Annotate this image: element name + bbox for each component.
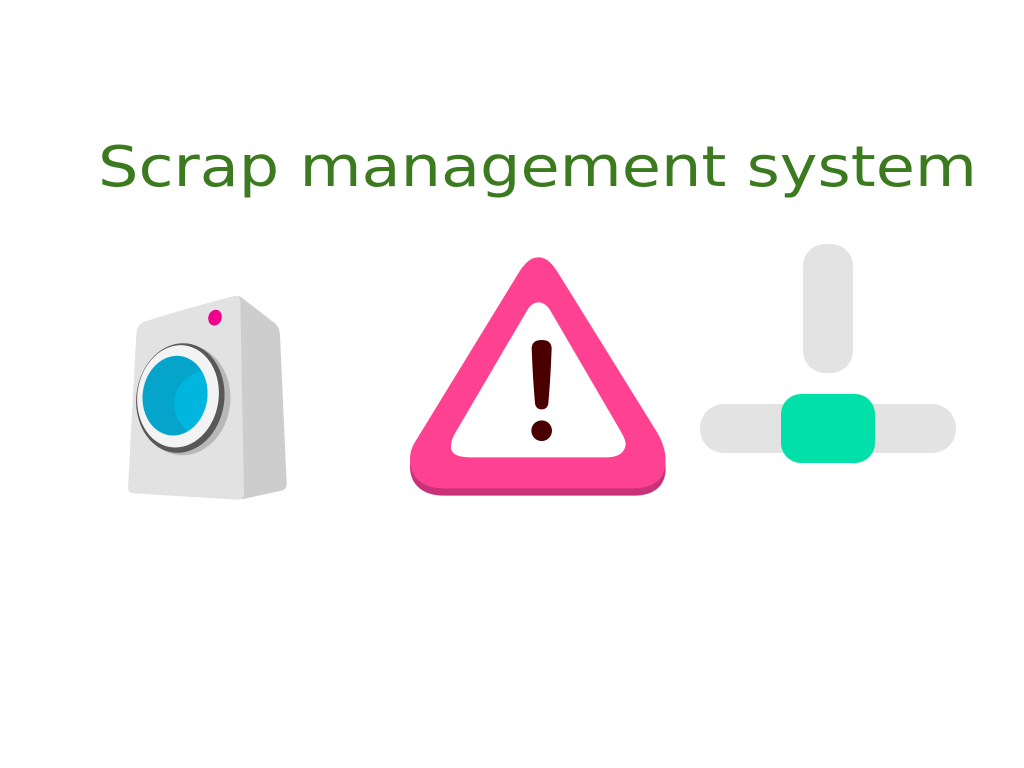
- indicator light: [206, 308, 224, 327]
- horizontal pipe: [700, 404, 956, 453]
- machine front panel: [128, 296, 244, 500]
- vertical pipe: [803, 244, 853, 373]
- door white ring: [131, 340, 225, 453]
- door glass: [137, 352, 213, 440]
- icon: warning triangle: [410, 257, 666, 496]
- icon: pipe junction: [700, 244, 956, 463]
- triangle inner: [451, 302, 626, 457]
- title: Scrap management system: [98, 135, 977, 200]
- icon: washing machine: [128, 296, 287, 500]
- door glass highlight: [174, 371, 208, 431]
- green connector: [781, 394, 875, 463]
- door shadow: [132, 340, 236, 460]
- exclamation mark: [531, 340, 552, 441]
- door dark ring: [129, 337, 232, 459]
- triangle shadow: [410, 265, 666, 496]
- triangle body: [410, 257, 666, 488]
- machine side panel: [230, 296, 287, 499]
